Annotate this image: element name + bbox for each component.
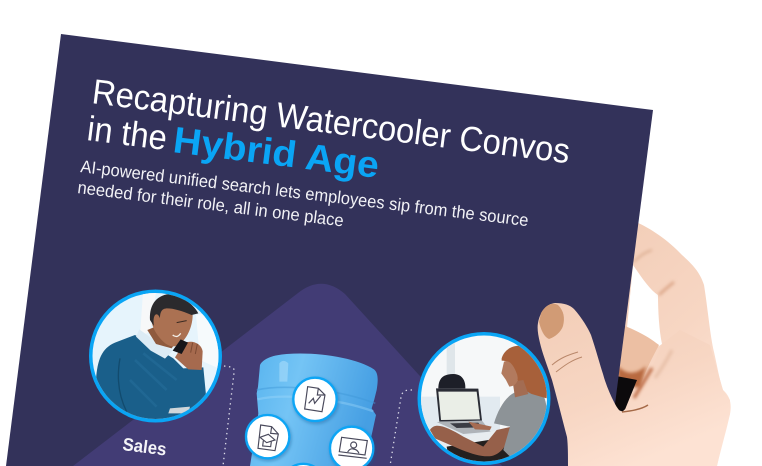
sweater <box>96 335 206 423</box>
hair <box>502 346 547 398</box>
jug ridges <box>257 387 375 403</box>
title: Recapturing Watercooler Convos <box>90 72 572 171</box>
hand: fingers behind the sheet <box>600 222 731 466</box>
phone <box>173 339 188 354</box>
neck and face <box>147 328 174 348</box>
icon: person on screen <box>330 427 373 466</box>
subtitle: AI-powered unified search lets employees sip from the source <box>80 156 530 230</box>
arm <box>430 426 512 456</box>
title: Hybrid Age <box>171 119 382 186</box>
sweater <box>494 390 547 457</box>
shirt collar <box>136 329 173 359</box>
icon: graduation document <box>246 415 289 458</box>
hand on phone <box>175 342 203 370</box>
desk <box>436 432 490 461</box>
dotted connector: right <box>390 390 412 466</box>
icon: thumbnail <box>539 304 564 339</box>
document sheet <box>6 34 653 466</box>
photo: sales man <box>89 290 222 422</box>
neck and face <box>513 380 528 397</box>
hair <box>150 294 198 326</box>
subtitle: needed for their role, all in one place <box>76 177 345 231</box>
icon: partial bottom circle <box>290 464 317 466</box>
icon: chart document <box>293 378 337 421</box>
diamond background panel <box>73 284 515 466</box>
hand: thumb and palm in front <box>538 303 730 466</box>
water jug <box>246 354 378 466</box>
dotted connector: left <box>223 366 234 466</box>
jug body <box>250 354 378 466</box>
label: Sales: Sales <box>121 434 168 459</box>
photo: woman at laptop <box>415 330 555 466</box>
laptop <box>436 388 482 422</box>
title: in the <box>85 109 169 158</box>
chair <box>438 374 465 388</box>
